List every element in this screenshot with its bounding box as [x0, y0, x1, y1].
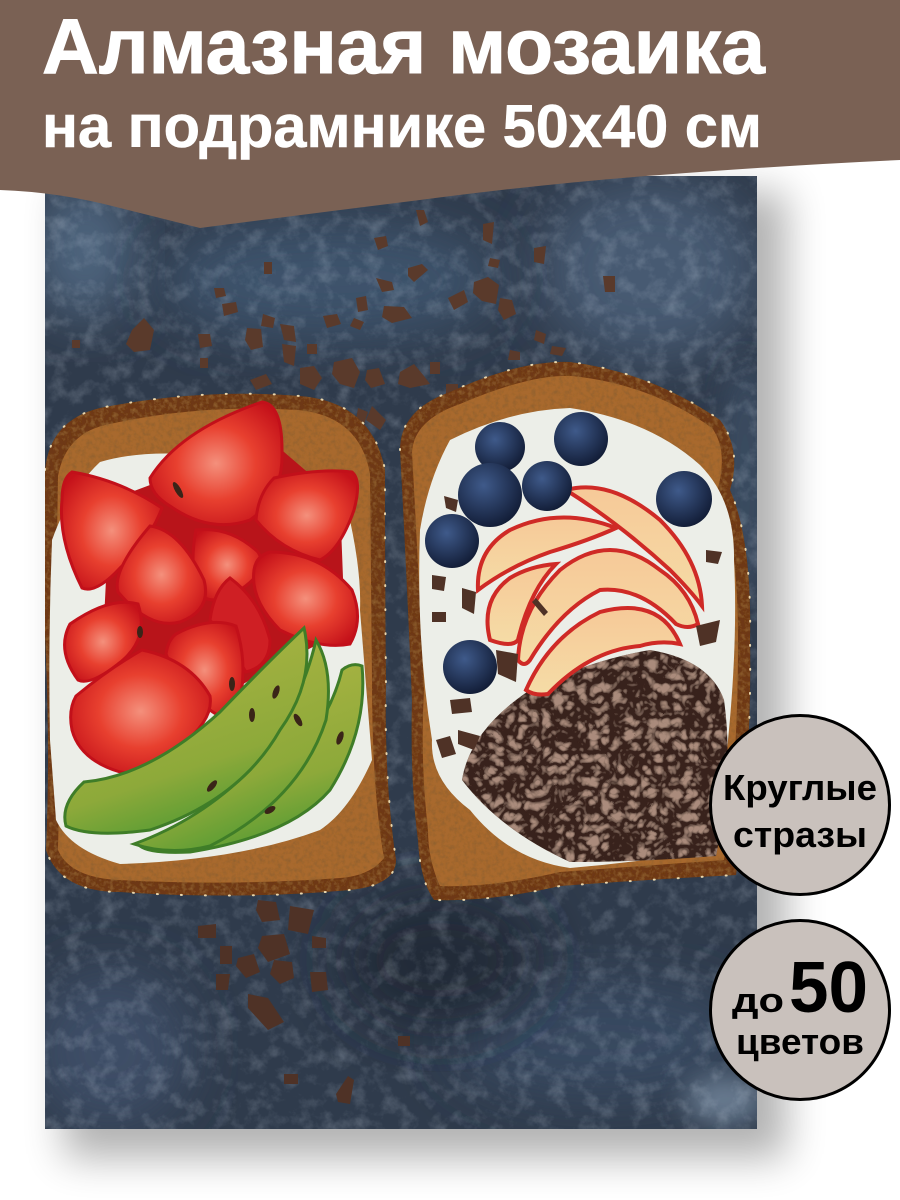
- flax seeds: [137, 481, 345, 816]
- badge: up to 50 colours: до: [732, 982, 784, 1020]
- badge: up to 50 colours: 50: [789, 948, 868, 1028]
- crust: [44, 394, 396, 896]
- avocado slices: [65, 628, 363, 852]
- chocolate pile: [462, 650, 728, 862]
- badge: up to 50 colours: [710, 920, 890, 1100]
- badge: round rhinestones: Круглые: [723, 767, 877, 808]
- badge: up to 50 colours: цветов: [736, 1021, 864, 1062]
- title line 1: Алмазная мозаика: [42, 2, 766, 90]
- chocolate flecks on cream: [432, 496, 722, 758]
- strawberry base: [104, 452, 343, 684]
- apple slices: [478, 487, 702, 694]
- sesame specks on crust: [45, 394, 396, 896]
- left toast: [44, 394, 396, 896]
- banner: [0, 0, 900, 228]
- artwork: canvas photo of two toasts: [30, 176, 770, 1130]
- title line 2: на подрамнике 50х40 см: [42, 93, 762, 160]
- slate background: [30, 176, 770, 1130]
- crust: [400, 362, 750, 900]
- right toast: [400, 362, 750, 900]
- crumb: [412, 376, 738, 886]
- strawberry slices: [61, 402, 358, 772]
- cream spread: [419, 408, 735, 868]
- blueberries: [425, 412, 712, 694]
- cream spread: [49, 454, 372, 864]
- sesame specks on crust: [400, 362, 750, 900]
- title: [42, 2, 766, 160]
- canvas shadow: [64, 192, 786, 1158]
- crumb: [56, 409, 384, 883]
- scattered chocolate crumbs, bottom: [198, 900, 410, 1104]
- badge: round rhinestones: [710, 716, 890, 894]
- scattered chocolate crumbs, top: [72, 210, 615, 430]
- badge: round rhinestones: стразы: [733, 814, 867, 855]
